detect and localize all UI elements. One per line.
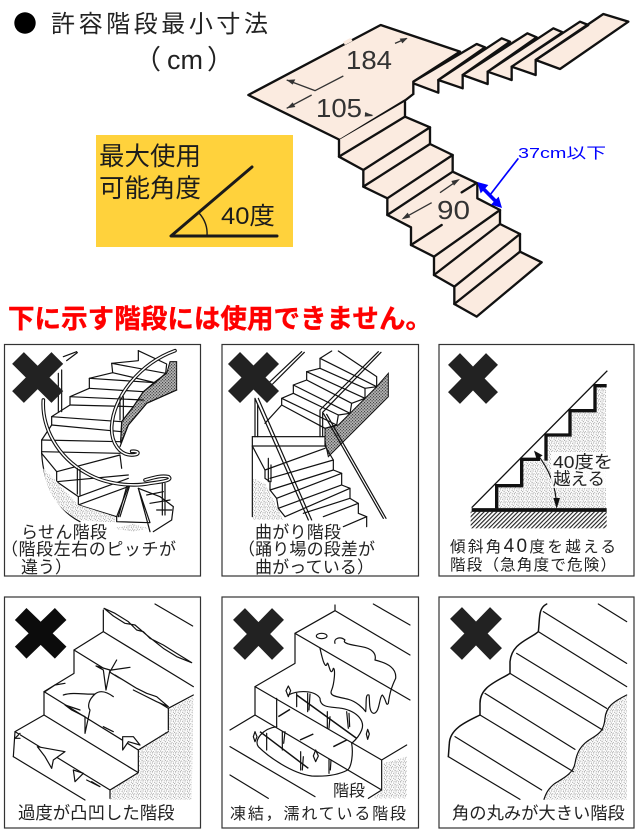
title [14,11,268,75]
angle label: 越える [553,469,605,489]
panel: steep stairs [439,344,634,576]
caption: らせん階段 [21,523,107,542]
title: ） [207,45,234,75]
icon: cross mark [454,359,492,398]
caption: 違う） [21,558,72,577]
dimension labels [316,47,470,225]
stair label: 階段 [333,782,365,800]
panel: frozen wet stairs [222,597,418,828]
caption [238,523,375,577]
caption: 凍結，濡れている階段 [230,805,406,823]
blue label: 37cm以下 [518,145,606,162]
caption: （踊り場の段差が [238,540,375,559]
landing [248,25,460,140]
panel: bent stairs [222,344,418,577]
panel: rounded stairs [439,597,634,828]
caption [1,523,176,577]
caption: 曲がり階段 [255,523,341,542]
warning heading: 下に示す階段には使用できません。 [8,304,432,334]
staircase diagram [248,14,628,317]
steep stair section drawing [471,371,607,528]
caption: 角の丸みが大きい階段 [452,803,625,823]
caption: 傾斜角40度を越える [450,536,616,557]
cracked stair drawing [13,604,193,800]
title: （ [134,45,161,75]
lower flight of stairs [339,102,542,317]
caption: （階段左右のピッチが [1,540,176,559]
dimension arrows [287,38,460,219]
icon: cross mark [234,358,273,397]
caption: 過度が凸凹した階段 [18,803,175,823]
panel: maximum usable angle: 最大使用 [99,143,201,171]
title: cm [167,45,203,75]
spiral stair drawing [42,351,177,532]
panel: uneven stairs [4,597,200,828]
dimension labels: 90 [437,197,470,225]
wet stair drawing [230,604,410,798]
icon: cross mark [456,613,496,654]
blue width arrow [477,158,518,208]
icon: cross mark [18,358,57,397]
panel: spiral stairs [1,344,200,577]
caption: 曲がっている） [255,558,374,577]
bent stair drawing [252,351,388,527]
upper flight of stairs [413,14,628,94]
angle label: 40度を [553,452,613,472]
icon: cross mark [239,614,278,654]
panel: maximum usable angle: 40度 [221,203,275,230]
title: 許容階段最小寸法 [51,11,268,38]
dimension labels: 105 [316,95,362,123]
angle label [551,452,613,489]
icon: cross mark [21,614,61,653]
caption [450,536,616,574]
icon: angle diagram [171,167,277,236]
dimension labels: 184 [346,47,392,75]
panel: maximum usable angle [96,135,293,247]
rounded stair drawing [448,604,627,799]
panel: maximum usable angle: 可能角度 [99,175,201,203]
caption: 階段（急角度で危険） [450,556,616,574]
